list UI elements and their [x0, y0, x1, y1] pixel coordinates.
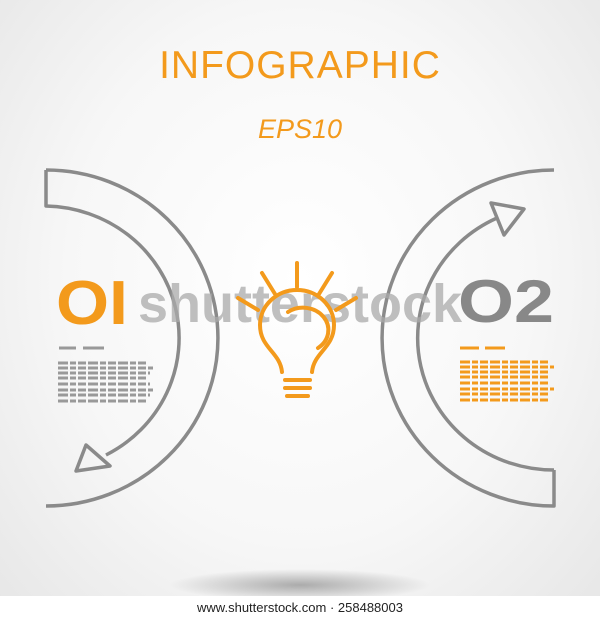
right text block	[460, 348, 554, 400]
number 01: OI	[56, 269, 128, 338]
footer	[0, 596, 600, 620]
right arrow ring	[382, 170, 554, 506]
footer: www.shutterstock.com · 258488003	[197, 600, 403, 615]
subtitle: EPS10	[258, 114, 342, 144]
left arrow ring	[46, 170, 218, 506]
title: INFOGRAPHIC	[159, 44, 441, 87]
left text block	[58, 348, 153, 401]
number 02: O2	[458, 268, 554, 335]
icon: light bulb	[238, 263, 356, 396]
watermark: shutterstock	[138, 274, 463, 334]
